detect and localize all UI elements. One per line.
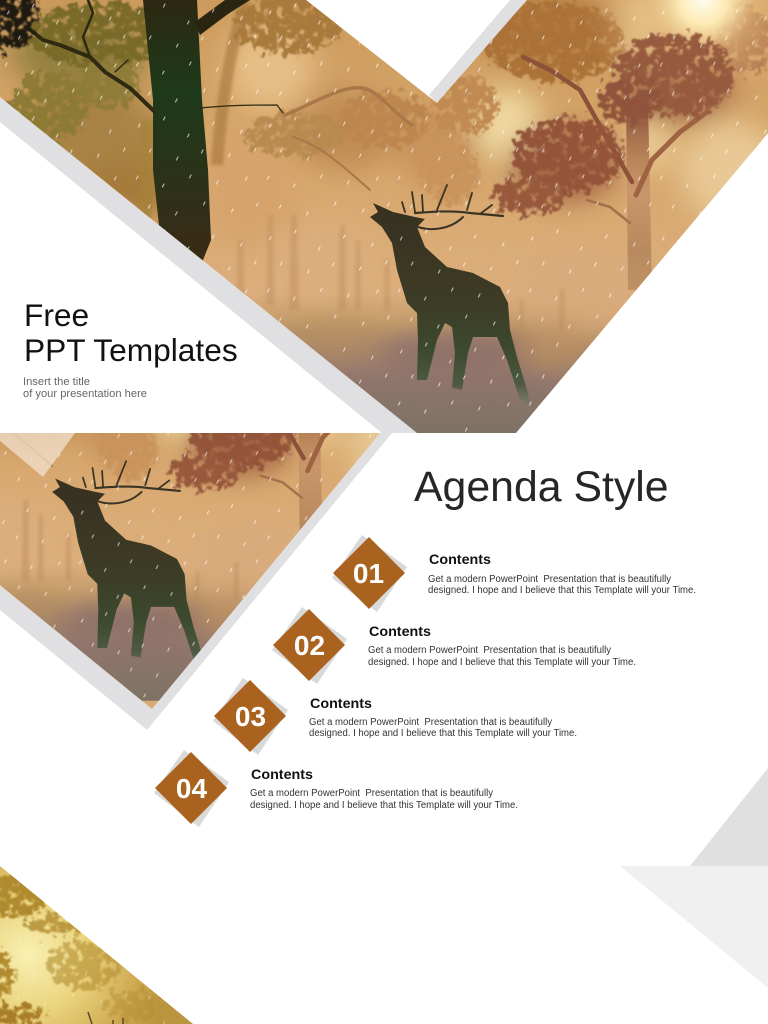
cover title: Free — [24, 297, 89, 333]
item text 01 — [428, 551, 696, 596]
cover title — [24, 297, 238, 368]
item text 02 — [368, 623, 636, 668]
agenda item 04 — [154, 750, 518, 827]
yellow forest corner photo — [0, 866, 200, 1024]
diamond badge 01 — [332, 535, 407, 612]
item text 01: Contents — [429, 551, 491, 567]
pale diamond overlay — [0, 433, 75, 477]
diamond badge 04 — [154, 750, 229, 827]
cover subtitle — [23, 376, 147, 400]
decorative gray triangles, lower right — [620, 768, 768, 988]
item text 03: Contents — [310, 695, 372, 711]
diamond badge 04: 04 — [176, 773, 207, 804]
item text 02: Contents — [369, 623, 431, 639]
diamond badge 01: 01 — [353, 558, 384, 589]
item text 04 — [250, 766, 518, 811]
agenda item 02 — [272, 607, 636, 684]
photo: stag in forest — [0, 0, 768, 435]
top photo section — [0, 0, 768, 435]
item text 04: designed. I hope and I believe that this Template will your Time. — [250, 800, 518, 811]
gray stripe: top notch — [429, 0, 527, 103]
agenda heading: Agenda Style — [414, 463, 669, 511]
diamond badge 03: 03 — [235, 701, 266, 732]
gray stripe: lower left — [0, 97, 417, 433]
diamond badge 02 — [272, 607, 347, 684]
diamond badge 03 — [213, 678, 288, 755]
item text 04: Get a modern PowerPoint Presentation that is beautifully — [250, 788, 493, 799]
item text 02: designed. I hope and I believe that this Template will your Time. — [368, 657, 636, 668]
gray stripe: agenda photo frame — [0, 433, 392, 730]
item text 02: Get a modern PowerPoint Presentation that is beautifully — [368, 645, 611, 656]
item text 03: designed. I hope and I believe that this Template will your Time. — [309, 728, 577, 739]
cover subtitle: of your presentation here — [23, 388, 147, 400]
agenda photo section — [0, 433, 392, 730]
agenda item 01 — [332, 535, 696, 612]
agenda item 03 — [213, 678, 577, 755]
item text 04: Contents — [251, 766, 313, 782]
diamond badge 02: 02 — [294, 630, 325, 661]
item text 01: Get a modern PowerPoint Presentation that is beautifully — [428, 574, 671, 585]
cover subtitle: Insert the title — [23, 376, 90, 388]
item text 03: Get a modern PowerPoint Presentation that is beautifully — [309, 717, 552, 728]
cover title: PPT Templates — [24, 332, 238, 368]
photo: stag crop — [0, 433, 380, 709]
item text 01: designed. I hope and I believe that this Template will your Time. — [428, 585, 696, 596]
item text 03 — [309, 695, 577, 739]
